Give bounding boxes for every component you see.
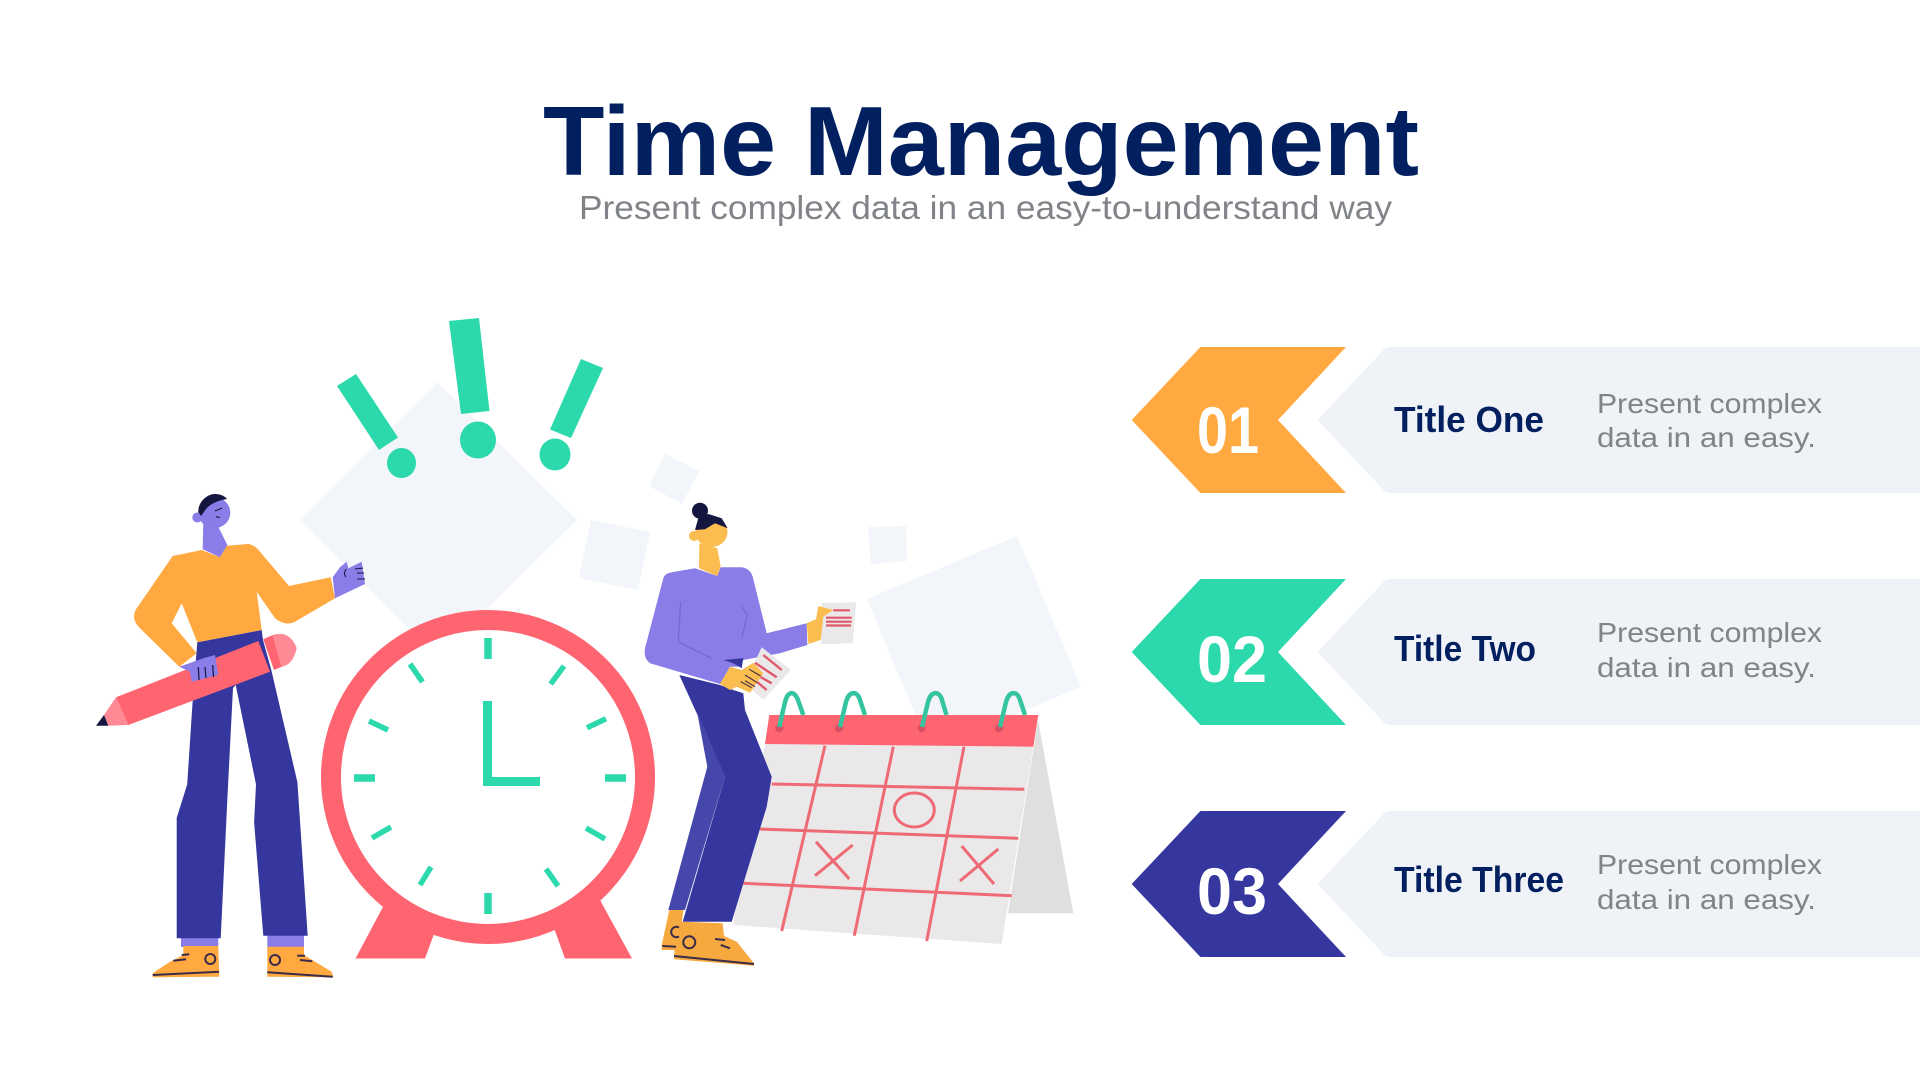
item 2 title: Title Two [1394, 628, 1536, 669]
title: Time Management [543, 86, 1419, 196]
item 1 description: Present complex [1597, 388, 1822, 419]
item 2 number: 02 [1197, 622, 1267, 696]
item 3 background panel [1318, 811, 1920, 957]
item 2 [1132, 579, 1920, 725]
item 1 description [1597, 388, 1822, 453]
item 2 background panel [1318, 579, 1920, 725]
subtitle: Present complex data in an easy-to-understand way [579, 189, 1393, 226]
item 2 description [1597, 617, 1822, 683]
item 3 description [1597, 849, 1822, 915]
item 1 title: Title One [1394, 399, 1544, 440]
item 3 [1132, 811, 1920, 957]
item 2 description: data in an easy. [1597, 652, 1816, 683]
item 3 description: data in an easy. [1597, 884, 1816, 915]
background shapes [299, 382, 1081, 750]
item 1 number chevron [1132, 347, 1346, 493]
item 2 description: Present complex [1597, 617, 1822, 648]
item 3 number: 03 [1197, 854, 1267, 928]
item 1 background panel [1318, 347, 1920, 493]
item 2 number chevron [1132, 579, 1346, 725]
item 3 number chevron [1132, 811, 1346, 957]
woman with papers [645, 503, 856, 966]
wall calendar [733, 693, 1073, 944]
item 3 title: Title Three [1394, 859, 1564, 900]
item 3 description: Present complex [1597, 849, 1822, 880]
item 1 [1132, 347, 1920, 493]
item 1 description: data in an easy. [1597, 422, 1816, 453]
man with pencil [96, 494, 365, 977]
alarm clock [331, 620, 645, 958]
item 1 number: 01 [1197, 393, 1259, 467]
exclamation marks [337, 318, 603, 478]
